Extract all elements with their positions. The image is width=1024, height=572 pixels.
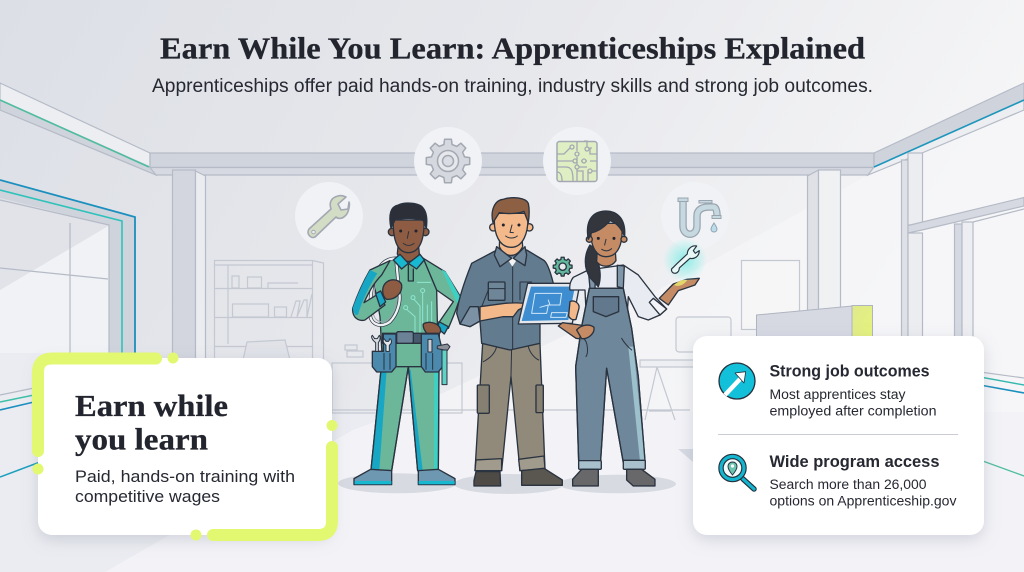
hand on hip [577,325,594,339]
lime bracket top-left [38,358,156,451]
coiled cable [370,258,400,325]
card heading: Earn while [75,388,228,423]
shirt [457,250,553,350]
straps [588,267,596,288]
floor and furniture outlines [214,260,800,420]
subtitle: Apprenticeships offer paid hands-on training, industry skills and strong job outcomes. [152,76,873,97]
hands [383,280,402,299]
left window frame [0,180,135,356]
near arm [353,261,390,320]
monitor [676,317,731,352]
right column [808,170,818,320]
heading: strong job outcomes: Strong job outcomes [770,362,930,380]
callout card: earn while you learn [32,352,338,540]
t-shirt [507,258,518,267]
tablet hand [569,301,579,320]
lime bracket bottom-right [213,447,332,535]
face [399,229,417,232]
shirt and sleeve [570,265,667,323]
ponytail [585,245,600,287]
right beam [874,83,1024,167]
shelf [214,260,312,364]
people group [338,198,707,494]
cuffs [579,461,601,469]
title: Earn While You Learn: Apprenticeships Explained [160,30,865,66]
icon: gear in circle [414,127,482,195]
right window frames [902,160,908,345]
left forearm [558,323,594,339]
text: search options: options on Apprenticeship.gov [770,494,957,508]
bib pocket [593,297,619,317]
text: most apprentices: Most apprentices stay [770,387,906,402]
floor shadows [338,473,676,494]
heading: wide program access: Wide program access [770,453,940,471]
card text: Paid, hands-on training with [75,468,295,486]
collar flaps [393,254,408,269]
neck and head [397,243,419,261]
tablet [518,283,580,324]
panel: outcomes and access [693,336,984,535]
circuit pattern [404,282,432,333]
glowing wrench [663,238,707,282]
icon: pipe and faucet in circle [661,182,729,250]
rolled cuff [460,307,480,327]
centre beam [150,153,874,168]
tool belt [383,333,439,343]
icon: growth arrow [719,363,755,399]
placket [408,263,413,281]
text: most apprentices: employed after completion [770,404,936,418]
tools [372,335,380,351]
left column [172,170,196,360]
shoes [354,469,392,485]
boots [573,469,598,486]
card heading: you learn [75,422,208,456]
pockets [488,282,505,300]
card text: competitive wages [75,488,220,506]
icon: magnifier with pin [721,456,754,489]
icon: wrench in circle [295,182,363,250]
pointing forearm [480,303,529,321]
sleeve cuff [649,298,667,315]
text: search options: Search more than 26,000 [770,477,926,492]
torso [372,258,438,367]
boots [474,472,501,486]
icon: small teal gear [553,257,572,276]
legs [371,363,439,471]
icon: circuit board in circle [543,127,611,195]
neck and face [597,247,616,266]
wall box with lime side [756,306,872,340]
hair [390,203,427,228]
collar flaps [494,247,512,267]
right forearm and open hand [659,278,699,305]
far arm [423,258,460,328]
side cabinet [332,363,462,413]
lime dots [32,352,338,540]
person: green coverall worker [353,203,460,485]
person: centre worker with tablet [457,198,580,486]
neck and head [499,233,523,255]
desk [640,360,700,367]
poster [742,260,800,330]
left beam [0,83,150,167]
legs [475,343,545,471]
right-hand wall lines [980,372,1024,378]
overalls [576,288,645,463]
person: worker in overalls [558,211,707,486]
